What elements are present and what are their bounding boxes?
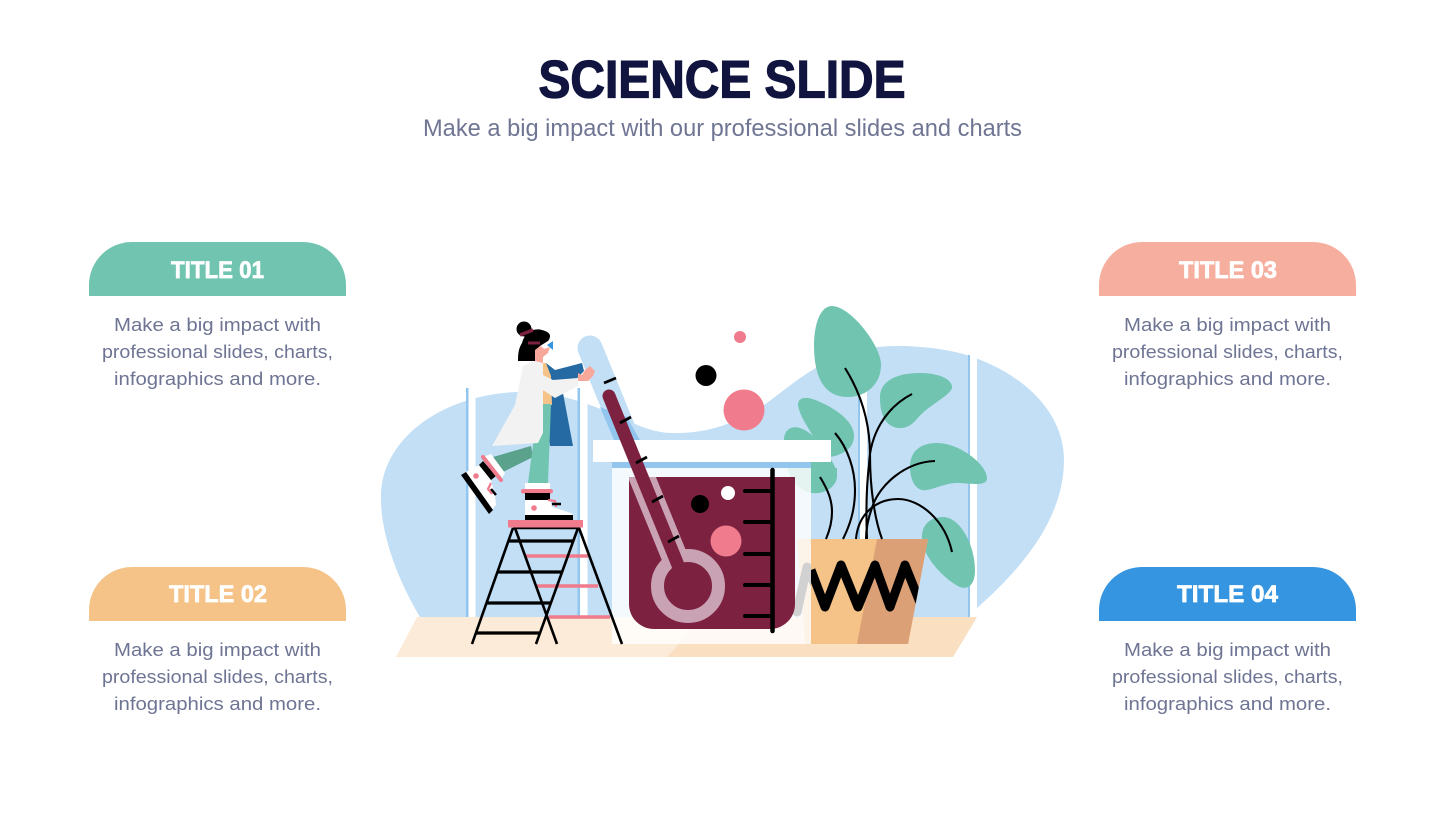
body text: title 02: professional slides, charts, [102, 667, 333, 687]
heading: title 01: TITLE 01 [171, 257, 264, 284]
ladder platform [508, 520, 583, 528]
leaf behind beaker [784, 427, 837, 493]
thermometer ticks [604, 378, 679, 542]
body text: title 04: Make a big impact with [1124, 640, 1331, 660]
pot [811, 539, 928, 644]
beaker rim shadow [612, 462, 811, 468]
ladder pink back rungs [525, 556, 610, 617]
body text: title 01: Make a big impact with [114, 315, 321, 335]
body text: title 02 [102, 640, 333, 714]
front leg [528, 404, 551, 483]
heading: title 04: TITLE 04 [1177, 581, 1279, 608]
panel: title 01 [89, 242, 346, 389]
header pill: title 02 [89, 567, 346, 621]
body text: title 04: professional slides, charts, [1112, 667, 1343, 687]
hand [578, 366, 595, 381]
beaker scale ruler [745, 470, 772, 631]
standing boot [521, 483, 573, 520]
ladder frame [472, 528, 622, 644]
body text: title 02: Make a big impact with [114, 640, 321, 660]
heading: title 03: TITLE 03 [1179, 257, 1277, 284]
goggles [541, 341, 553, 350]
plant [797, 306, 987, 644]
body text: title 01: infographics and more. [114, 369, 321, 389]
beaker liquid [629, 477, 795, 629]
beaker body [612, 468, 811, 644]
plant pot seen through beaker [797, 539, 928, 644]
stems [820, 368, 952, 552]
body text: title 01: professional slides, charts, [102, 342, 333, 362]
beaker lid [593, 440, 831, 462]
glass tube [590, 348, 652, 500]
background blob [381, 346, 1064, 617]
pot zigzag [811, 565, 925, 615]
header pill: title 04 [1099, 567, 1356, 621]
body text: title 04 [1112, 640, 1343, 714]
body text: title 03 [1112, 315, 1343, 389]
body text: title 03: Make a big impact with [1124, 315, 1331, 335]
back leg [493, 446, 533, 472]
body text: title 04: infographics and more. [1124, 694, 1331, 714]
illustration: scientist and beaker [381, 306, 1064, 657]
body text: title 03: professional slides, charts, [1112, 342, 1343, 362]
panel: title 02 [89, 567, 346, 714]
liquid bubbles [691, 486, 742, 556]
thermometer [604, 378, 718, 616]
back cape and sleeve [545, 363, 584, 446]
vest [543, 363, 552, 405]
raised boot [461, 454, 505, 514]
body text: title 03: infographics and more. [1124, 369, 1331, 389]
subtitle: Make a big impact with our professional slides and charts [423, 115, 1022, 142]
header pill: title 01 [89, 242, 346, 296]
body text: title 02: infographics and more. [114, 694, 321, 714]
floating bubbles [696, 331, 764, 430]
scientist [461, 322, 595, 520]
neck and face [535, 346, 550, 363]
header pill: title 03 [1099, 242, 1356, 296]
panel: title 04 [1099, 567, 1356, 714]
ladder [472, 520, 622, 644]
body text: title 01 [102, 315, 333, 389]
floor [396, 617, 977, 657]
window frame stripes [466, 355, 977, 617]
slide canvas [89, 60, 1356, 714]
heading: title 02: TITLE 02 [169, 581, 267, 608]
title: SCIENCE SLIDE [538, 50, 906, 109]
panel: title 03 [1099, 242, 1356, 389]
leaves [798, 306, 987, 588]
lab coat [492, 361, 578, 446]
hair [516, 322, 550, 361]
